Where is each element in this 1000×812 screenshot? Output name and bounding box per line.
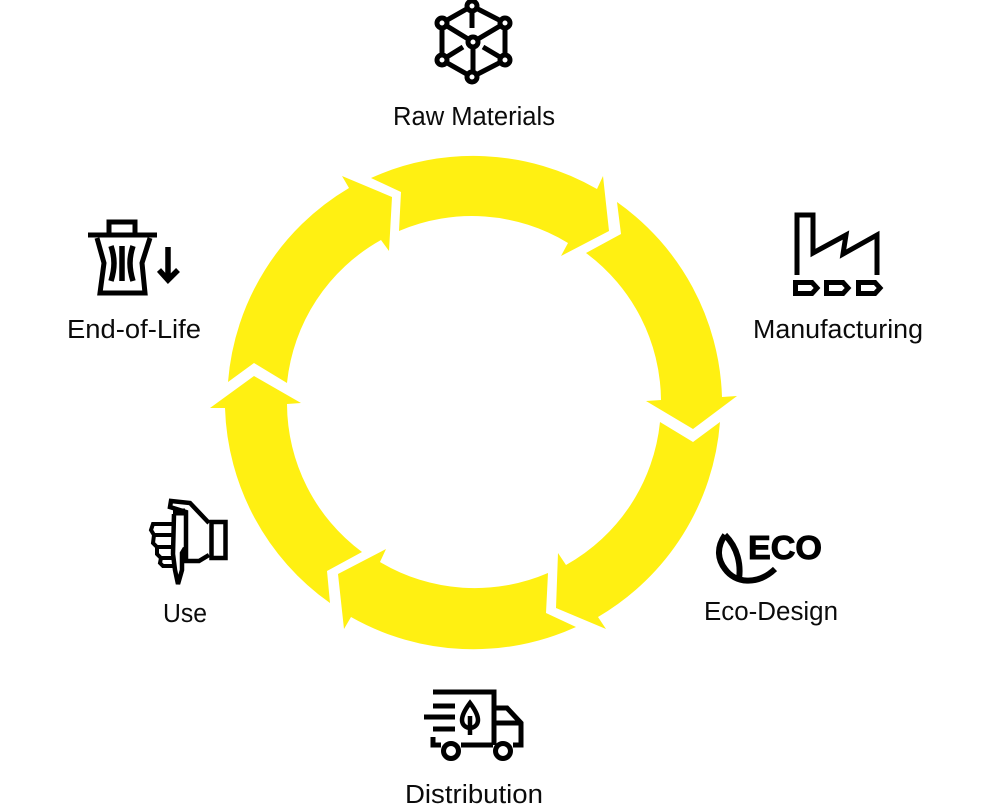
label: eco-design: Eco-Design bbox=[704, 598, 838, 626]
arrow: distribution to use bbox=[338, 549, 576, 649]
cycle ring of six arrows bbox=[210, 156, 737, 649]
icon: trash bin with down arrow bbox=[88, 222, 178, 293]
icon: hand holding pen, thumbs down bbox=[151, 501, 226, 584]
arrow: manufacturing to eco-design bbox=[586, 202, 737, 429]
label: end-of-life: End-of-Life bbox=[67, 316, 201, 344]
icon: raw materials molecule cube bbox=[437, 1, 510, 82]
arrow: use to end-of-life bbox=[210, 376, 362, 603]
label: raw materials: Raw Materials bbox=[393, 103, 555, 131]
icon: eco leaf with wordmark bbox=[719, 529, 822, 581]
label: use: Use bbox=[163, 600, 207, 628]
arrow: eco-design to distribution bbox=[556, 422, 720, 629]
icon: delivery truck with leaf bbox=[424, 692, 521, 758]
icon: factory bbox=[796, 215, 880, 294]
arrow: raw materials to manufacturing bbox=[371, 156, 609, 256]
icon: eco leaf with wordmark: ECO bbox=[748, 529, 822, 566]
label: distribution: Distribution bbox=[405, 781, 543, 809]
arrow: end-of-life to raw materials bbox=[228, 176, 392, 383]
label: manufacturing: Manufacturing bbox=[753, 316, 923, 344]
